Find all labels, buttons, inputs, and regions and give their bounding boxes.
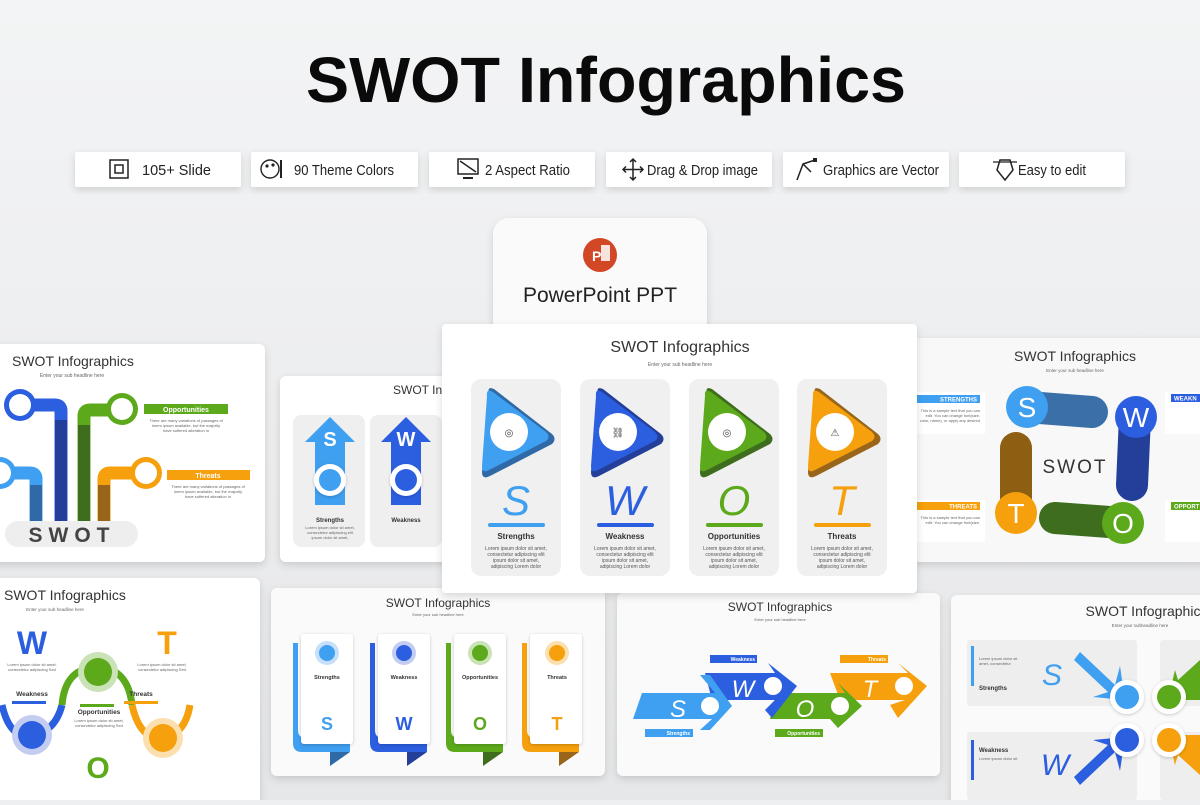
opportunities box bbox=[1165, 500, 1200, 542]
panel: slide left-top pipes: Enter your sub headline here bbox=[40, 373, 104, 379]
chevron O: O bbox=[796, 696, 814, 723]
column: Strengths: ◎ bbox=[505, 428, 514, 439]
panel: slide bottom-right arrows bbox=[951, 595, 1200, 805]
label: Opportunities: lorem ipsum available, but the majority bbox=[152, 423, 220, 428]
column: Threats: T bbox=[829, 477, 858, 524]
feature bar bbox=[75, 152, 1125, 187]
column: Weakness: ⛓ bbox=[612, 427, 624, 439]
chevron S: S bbox=[670, 696, 686, 723]
panel: slide bottom cards: Strengths bbox=[314, 675, 340, 681]
panel: slide bottom-right arrows: S bbox=[1042, 659, 1062, 692]
panel: slide bottom arrows chevrons: Strengths bbox=[667, 731, 690, 737]
chevron T: T bbox=[863, 676, 880, 703]
chevron W: W bbox=[732, 676, 757, 703]
panel: slide bottom-right arrows: W bbox=[1041, 749, 1072, 782]
panel: slide arrows: W bbox=[397, 429, 416, 451]
feature: Drag & Drop image: Drag & Drop image bbox=[647, 162, 758, 179]
label: Threats: have suffered alteration in bbox=[185, 494, 231, 499]
feature: Easy to edit: Easy to edit bbox=[1018, 162, 1087, 179]
ring: S bbox=[1018, 392, 1036, 423]
column: Opportunities: Opportunities bbox=[708, 532, 761, 541]
strengths box: STRENGTHS bbox=[940, 398, 977, 404]
panel: slide bottom-left wave: W bbox=[17, 625, 48, 661]
column: Strengths: Lorem ipsum dolor sit amet, bbox=[485, 546, 547, 552]
panel: slide bottom-left wave: consectetur adipiscing Sed bbox=[8, 667, 56, 672]
panel: slide bottom-left wave: Weakness bbox=[16, 691, 48, 698]
label: Threats bbox=[167, 470, 250, 499]
panel: slide right SWOT ring bbox=[910, 338, 1200, 562]
column: Threats: ⚠ bbox=[831, 428, 840, 439]
strengths box: This is a sample text that you can bbox=[921, 408, 980, 413]
panel: slide arrows: ipsum dolor sit amet, bbox=[312, 535, 348, 540]
panel: PowerPoint PPT card: PowerPoint PPT bbox=[523, 284, 677, 307]
feature: 105+ Slide: 105+ Slide bbox=[142, 162, 211, 179]
panel: slide bottom arrows chevrons: Opportunities bbox=[787, 731, 820, 737]
panel: slide bottom-left wave: Enter your sub headline here bbox=[26, 607, 84, 612]
chevron S bbox=[633, 675, 732, 730]
threats box: edit. You can change font(size, bbox=[926, 520, 980, 525]
column: Opportunities: consectetur adipiscing elit bbox=[705, 552, 763, 558]
wave bbox=[2, 652, 190, 758]
panel: slide bottom cards: Opportunities bbox=[462, 675, 498, 681]
column: Weakness: Lorem ipsum dolor sit amet, bbox=[594, 546, 656, 552]
column: Strengths: adipiscing Lorem dolor bbox=[491, 564, 541, 570]
column: Weakness bbox=[580, 379, 670, 576]
column: Threats: Threats bbox=[828, 532, 857, 541]
label: Opportunities: There are many variations of passages of bbox=[149, 418, 224, 423]
panel: slide left-top pipes bbox=[0, 344, 265, 562]
panel: slide bottom cards: Enter your sub headline here bbox=[412, 612, 464, 617]
label: Threats: Threats bbox=[195, 473, 221, 480]
label: Opportunities: Opportunities bbox=[163, 407, 209, 414]
panel: slide bottom cards: O bbox=[473, 714, 487, 734]
panel: slide bottom arrows chevrons bbox=[617, 593, 940, 776]
strengths box: edit. You can change font(size, bbox=[926, 413, 980, 418]
panel: slide bottom cards: S bbox=[321, 714, 333, 734]
panel: slide bottom-right arrows: Weakness bbox=[979, 748, 1009, 754]
strengths box: color, name), or apply any desired bbox=[920, 418, 980, 423]
panel: slide bottom cards bbox=[271, 588, 605, 776]
opportunities box: OPPORT bbox=[1174, 504, 1200, 510]
ring: O bbox=[1112, 508, 1134, 539]
panel: slide bottom-left wave: O bbox=[86, 752, 110, 785]
panel: slide bottom-right arrows: Strengths bbox=[979, 686, 1008, 692]
column: Strengths: ipsum dolor sit amet, bbox=[493, 558, 539, 564]
panel: slide arrows: Strengths bbox=[316, 518, 345, 524]
column: Threats: adipiscing Lorem dolor bbox=[817, 564, 867, 570]
feature: 90 Theme Colors bbox=[251, 152, 418, 187]
column: Weakness: W bbox=[605, 477, 648, 524]
SWOT pill: SWOT bbox=[28, 524, 116, 547]
panel: slide arrows: S bbox=[323, 429, 337, 451]
panel: slide bottom cards: Weakness bbox=[391, 675, 417, 681]
panel: slide right SWOT ring: SWOT Infographics bbox=[1014, 348, 1136, 364]
panel: slide bottom arrows chevrons: Enter your sub headline here bbox=[754, 617, 806, 622]
feature: Easy to edit bbox=[959, 152, 1125, 187]
panel: slide bottom-left wave: Lorem ipsum dolor sit amet, bbox=[74, 718, 124, 723]
column: Threats: Lorem ipsum dolor sit amet, bbox=[811, 546, 873, 552]
panel: slide bottom-right arrows: amet, consectetur bbox=[979, 661, 1011, 666]
column: Strengths: Strengths bbox=[497, 532, 535, 541]
column: Threats: ipsum dolor sit amet, bbox=[819, 558, 865, 564]
column: Opportunities: O bbox=[718, 477, 750, 524]
label: Threats: There are many variations of passages of bbox=[171, 484, 246, 489]
feature: Graphics are Vector bbox=[783, 152, 949, 187]
panel: slide bottom-right arrows: Enter your subheadline here bbox=[1112, 623, 1169, 628]
panel: slide bottom-left wave: Lorem ipsum dolor sit amet, bbox=[137, 662, 187, 667]
panel: center slide triangles: SWOT Infographics bbox=[610, 339, 750, 356]
strengths box bbox=[917, 392, 985, 434]
label: Opportunities bbox=[144, 404, 228, 433]
panel: PowerPoint PPT card bbox=[493, 218, 707, 338]
panel: slide bottom-left wave: Threats bbox=[129, 691, 153, 698]
column: Weakness: consectetur adipiscing elit bbox=[596, 552, 654, 558]
chevron O bbox=[770, 683, 862, 728]
column: Threats bbox=[797, 379, 887, 576]
panel: slide bottom cards: SWOT Infographics bbox=[386, 596, 490, 610]
column: Opportunities: ipsum dolor sit amet, bbox=[711, 558, 757, 564]
threats box: THREATS bbox=[949, 504, 977, 510]
ring bbox=[995, 386, 1157, 544]
panel: center slide triangles: Enter your sub headline here bbox=[648, 362, 712, 368]
column: Opportunities: ◎ bbox=[723, 428, 732, 439]
panel: slide bottom-right arrows: Lorem ipsum dolor sit bbox=[979, 656, 1018, 661]
panel: slide left-top pipes: SWOT Infographics bbox=[12, 353, 134, 369]
feature: 90 Theme Colors: 90 Theme Colors bbox=[294, 162, 394, 179]
column: Weakness: Weakness bbox=[606, 532, 645, 541]
column: Threats: consectetur adipiscing elit bbox=[813, 552, 871, 558]
column: Strengths: S bbox=[502, 477, 530, 524]
feature: 2 Aspect Ratio bbox=[429, 152, 595, 187]
ring: T bbox=[1007, 498, 1025, 529]
column: Opportunities: Lorem ipsum dolor sit amet, bbox=[703, 546, 765, 552]
feature: Drag & Drop image bbox=[606, 152, 772, 187]
label: Threats: lorem ipsum available, but the majority bbox=[174, 489, 242, 494]
panel: slide bottom arrows chevrons: Threats bbox=[868, 657, 886, 663]
feature: Graphics are Vector: Graphics are Vector bbox=[823, 162, 939, 179]
panel: slide bottom-left wave: Opportunities bbox=[78, 709, 121, 716]
panel: slide bottom-left wave bbox=[0, 578, 260, 805]
feature: 105+ Slide bbox=[75, 152, 241, 187]
column: Weakness: adipiscing Lorem dolor bbox=[600, 564, 650, 570]
panel: slide bottom-left wave: T bbox=[157, 625, 177, 661]
panel: slide arrows: Lorem ipsum dolor sit amet, bbox=[305, 525, 355, 530]
chevron W bbox=[705, 663, 797, 718]
chevron T bbox=[830, 663, 927, 718]
ring: SWOT bbox=[1042, 457, 1108, 478]
panel: slide bottom cards: Threats bbox=[547, 675, 567, 681]
panel: slide bottom-right arrows: SWOT Infographic bbox=[1086, 603, 1200, 619]
column: Opportunities: adipiscing Lorem dolor bbox=[709, 564, 759, 570]
panel: slide bottom-left wave: Lorem ipsum dolor sit amet, bbox=[7, 662, 57, 667]
pipes bbox=[0, 389, 162, 522]
column: Weakness: ipsum dolor sit amet, bbox=[602, 558, 648, 564]
SWOT pill bbox=[5, 521, 138, 547]
panel: slide bottom-left wave: consectetur adipiscing Sed bbox=[75, 723, 123, 728]
icon: powerpoint bbox=[583, 238, 617, 272]
panel: slide bottom cards: T bbox=[552, 714, 562, 734]
weakness box: WEAKN bbox=[1174, 396, 1197, 402]
column: Strengths: consectetur adipiscing elit bbox=[487, 552, 545, 558]
panel: slide bottom arrows chevrons: SWOT Infographics bbox=[728, 600, 832, 614]
weakness box bbox=[1165, 392, 1200, 434]
icon: powerpoint: P bbox=[592, 248, 601, 264]
threats box bbox=[917, 500, 985, 542]
threats box: This is a sample text that you can bbox=[921, 515, 980, 520]
panel: slide bottom-left wave: SWOT Infographics bbox=[4, 587, 126, 603]
panel: slide arrows: consectetur adipiscing elit bbox=[307, 530, 354, 535]
panel: slide bottom-left wave: consectetur adipiscing Sed bbox=[138, 667, 186, 672]
title: SWOT Infographics bbox=[306, 44, 906, 116]
ring: W bbox=[1123, 402, 1150, 433]
panel: slide bottom arrows chevrons: Weakness bbox=[731, 657, 755, 663]
panel: slide arrows bbox=[280, 376, 460, 562]
label: Opportunities: have suffered alteration in bbox=[163, 428, 209, 433]
feature: 2 Aspect Ratio: 2 Aspect Ratio bbox=[485, 162, 570, 179]
panel: slide arrows: Weakness bbox=[391, 518, 421, 524]
column: Strengths bbox=[471, 379, 561, 576]
column: Opportunities bbox=[689, 379, 779, 576]
panel: slide right SWOT ring: Enter your sub headline here bbox=[1046, 368, 1104, 373]
panel: slide arrows: SWOT In bbox=[393, 383, 442, 397]
panel: slide bottom cards: W bbox=[396, 714, 412, 734]
panel: slide bottom-right arrows: Lorem ipsum dolor sit bbox=[979, 756, 1018, 761]
panel: center slide triangles bbox=[442, 324, 917, 593]
